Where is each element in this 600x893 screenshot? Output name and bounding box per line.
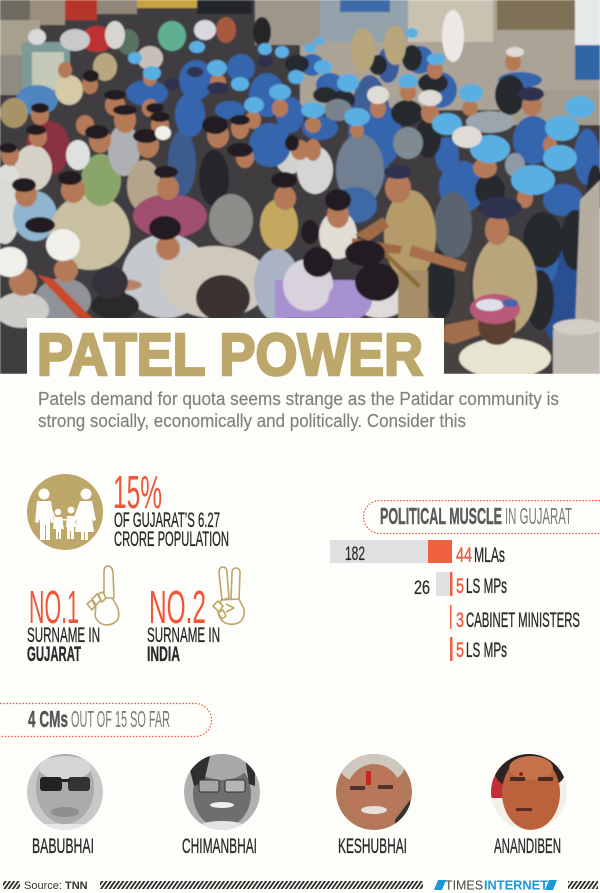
row: cabinet ministers [450,605,580,632]
title: PATEL POWER [37,322,423,388]
row: LS MPs second [450,637,507,662]
portrait: Babubhai [27,752,103,832]
stat: No.2 surname in India: SURNAME IN [147,624,220,647]
stat: 15% of population [113,466,229,551]
heading pill: political muscle: POLITICAL MUSCLE [380,503,502,529]
icon: two finger hand [213,567,244,624]
stat: No.2 surname in India [147,581,220,666]
heading pill: 4 CMs [0,704,212,736]
row: LS MPs second: LS MPs [466,639,507,662]
row: cabinet ministers: 3 [456,609,464,632]
icon: family [27,474,103,550]
row: MLAs: 44 [456,544,472,567]
intro text: strong socially, economically and politically. Consider this [38,410,466,431]
stat: 15% of population: CRORE POPULATION [114,528,229,551]
portrait: Chimanbhai [184,752,260,831]
row: MLAs [330,540,505,567]
portrait: Anandiben [491,748,567,830]
name labels: BABUBHAI [32,835,94,858]
stat: No.1 surname in Gujarat: NO.1 [29,581,79,633]
stat: No.1 surname in Gujarat [27,581,100,666]
stat: No.2 surname in India: INDIA [147,643,180,666]
row: MLAs: MLAs [474,544,505,567]
heading pill: 4 CMs: 4 CMs [28,706,68,732]
title panel [27,318,444,374]
intro text: Patels demand for quota seems strange as the Patidar community is [38,388,559,409]
row: LS MPs: LS MPs [466,575,507,598]
row: LS MPs: 26 [414,578,430,599]
stat: No.2 surname in India: NO.2 [149,581,206,633]
name labels [32,835,561,858]
row: MLAs: 182 [345,544,365,565]
footer: source and logo: Source: TNN [24,880,88,892]
row: LS MPs [414,572,507,599]
footer: source and logo [3,878,598,892]
portrait: Keshubhai [336,752,412,830]
footer: source and logo: TIMES [445,878,483,892]
stat: 15% of population: 15% [113,466,162,518]
bar chart: political muscle [330,540,580,662]
footer: source and logo: INTERNET [484,878,548,892]
stat: 15% of population: OF GUJARAT’S 6.27 [114,509,220,532]
icon: one finger hand [87,566,119,625]
photo: police and protesters [0,0,600,378]
row: LS MPs: 5 [456,575,464,598]
row: LS MPs second: 5 [456,639,464,662]
name labels: CHIMANBHAI [182,835,257,858]
stat: No.1 surname in Gujarat: SURNAME IN [27,624,100,647]
intro text [38,388,559,431]
heading pill: 4 CMs: OUT OF 15 SO FAR [71,706,170,732]
stat: No.1 surname in Gujarat: GUJARAT [27,643,81,666]
name labels: KESHUBHAI [338,835,407,858]
